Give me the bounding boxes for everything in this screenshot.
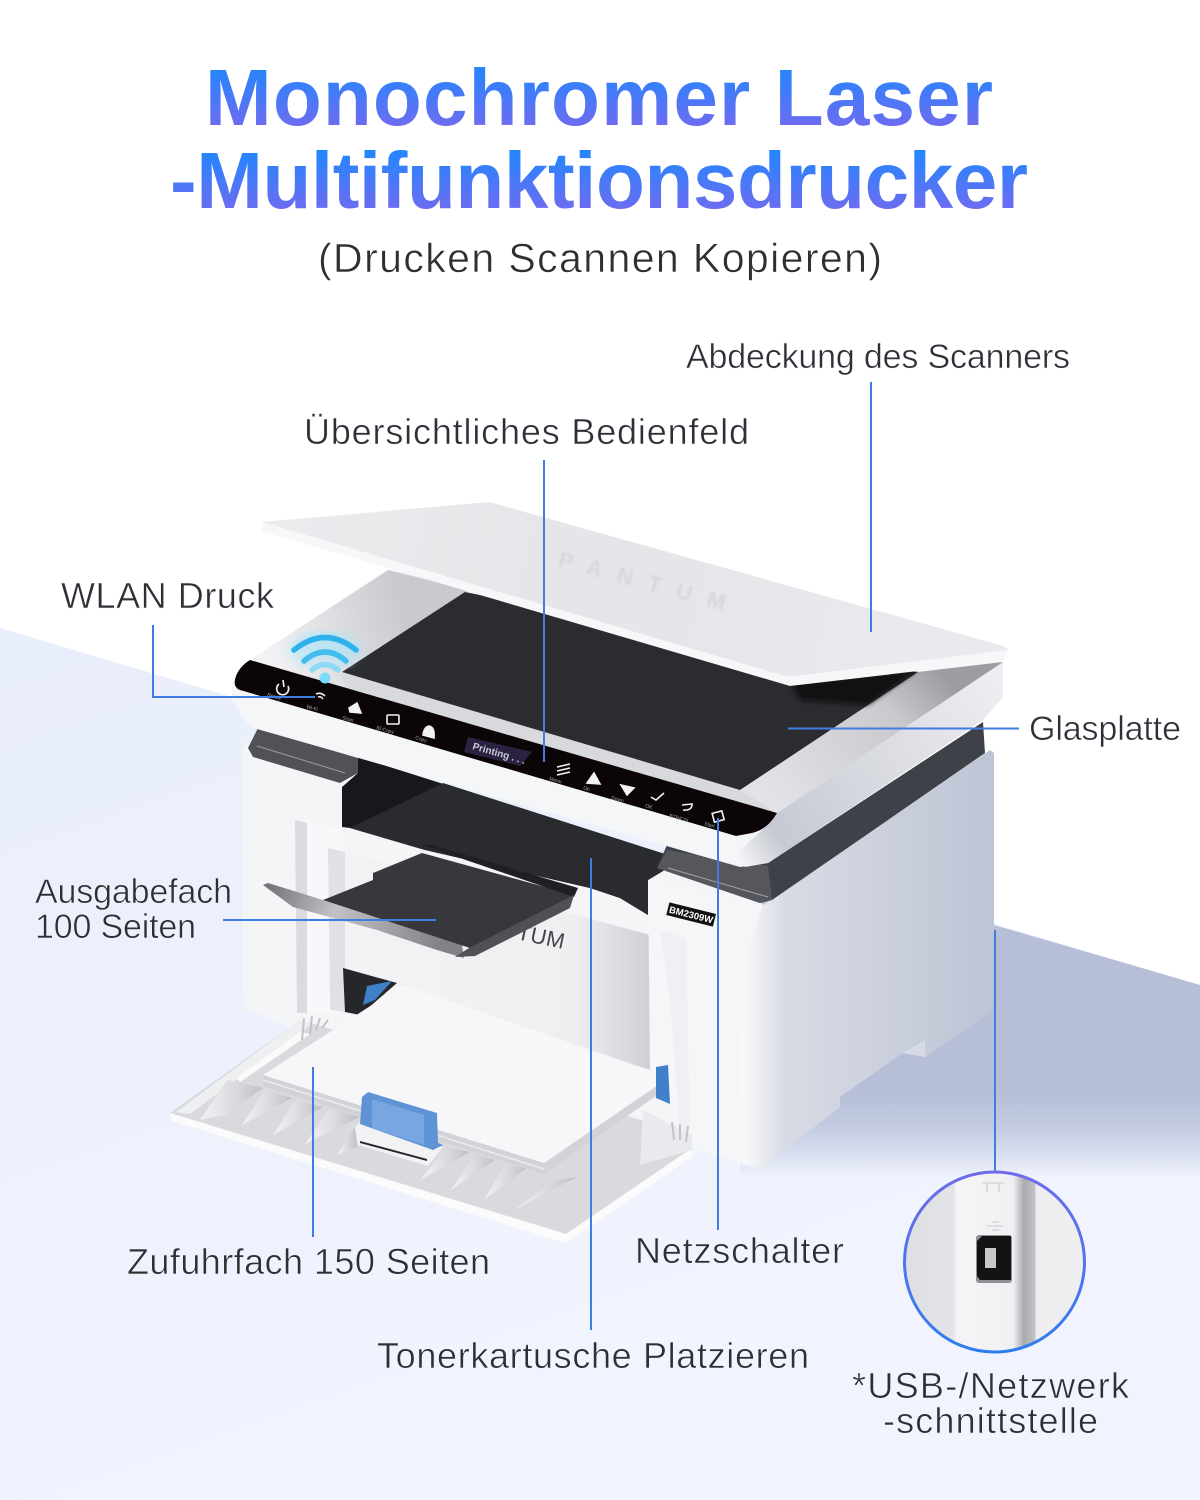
leader: input tray (312, 1067, 314, 1237)
leader: output tray (223, 919, 436, 921)
panel captions: Menu (548, 776, 562, 785)
scanner glass (342, 592, 918, 790)
panel captions: OK (644, 803, 654, 811)
label: power switch: Netzschalter (635, 1230, 844, 1271)
leader: wifi printing (153, 625, 315, 697)
label: usb: *USB-/Netzwerk (852, 1365, 1130, 1406)
lid logo: PANTUM (556, 547, 728, 615)
panel captions: Wi-Fi (305, 704, 318, 713)
printer body (242, 742, 994, 1168)
label: toner: Tonerkartusche Platzieren (377, 1335, 809, 1376)
scanner housing (232, 570, 1003, 867)
leader: toner (590, 858, 592, 1330)
label: usb: -schnittstelle (883, 1400, 1098, 1441)
panel captions: BTB/CSL (668, 813, 690, 825)
leader: usb (994, 930, 996, 1172)
left paper guide (363, 981, 392, 1005)
title (170, 53, 1028, 225)
panel captions: Scan (341, 715, 354, 724)
subtitle: (Drucken Scannen Kopieren) (318, 235, 882, 281)
printer (170, 502, 1008, 1243)
panel captions: Copy (414, 735, 428, 744)
paper stack (263, 985, 658, 1174)
front panel recess (295, 820, 345, 1013)
label: usb (852, 1365, 1130, 1441)
title: Monochromer Laser (205, 53, 993, 142)
usb port (976, 1235, 1012, 1283)
tray hinges (302, 1016, 688, 1142)
embossed symbols (982, 1183, 1004, 1230)
right paper guide (656, 1065, 670, 1104)
brand mark: TUM (515, 919, 567, 954)
display (464, 737, 532, 767)
output tray (263, 845, 578, 958)
model label: BM2309W (668, 905, 714, 926)
lid shadow (790, 670, 918, 705)
blue paper clip (355, 1092, 443, 1166)
label: output tray: Ausgabefach (35, 873, 232, 911)
panel buttons (277, 680, 724, 822)
leader: control panel (543, 460, 545, 762)
leader: scanner cover (870, 382, 872, 632)
leader: power switch (717, 818, 719, 1230)
input tray (170, 1016, 692, 1243)
panel captions: Start (703, 821, 716, 830)
label: output tray (35, 873, 232, 946)
label: control panel: Übersichtliches Bedienfeld (304, 411, 749, 452)
label: scanner cover: Abdeckung des Scanners (686, 338, 1070, 376)
display: Printing . . . (471, 741, 527, 767)
dark band under scanner (248, 722, 985, 903)
paper slot (343, 968, 397, 1015)
panel captions: Ready (266, 692, 282, 702)
output cavity (342, 757, 668, 915)
label: wifi printing: WLAN Druck (61, 575, 275, 616)
panel captions: Up (582, 785, 590, 793)
panel captions: Down (610, 795, 625, 805)
wifi icon (294, 638, 356, 684)
control panel (235, 660, 777, 836)
tray ribs (200, 1080, 577, 1210)
panel captions (266, 692, 716, 830)
usb inset (904, 1172, 1086, 1354)
scanner lid (262, 502, 1008, 686)
title: -Multifunktionsdrucker (170, 136, 1028, 225)
label: input tray: Zufuhrfach 150 Seiten (127, 1241, 490, 1282)
label: glass plate: Glasplatte (1029, 710, 1181, 748)
panel captions: ID Copy (375, 725, 395, 736)
label: output tray: 100 Seiten (35, 908, 196, 946)
leader: glass plate (788, 728, 1019, 730)
